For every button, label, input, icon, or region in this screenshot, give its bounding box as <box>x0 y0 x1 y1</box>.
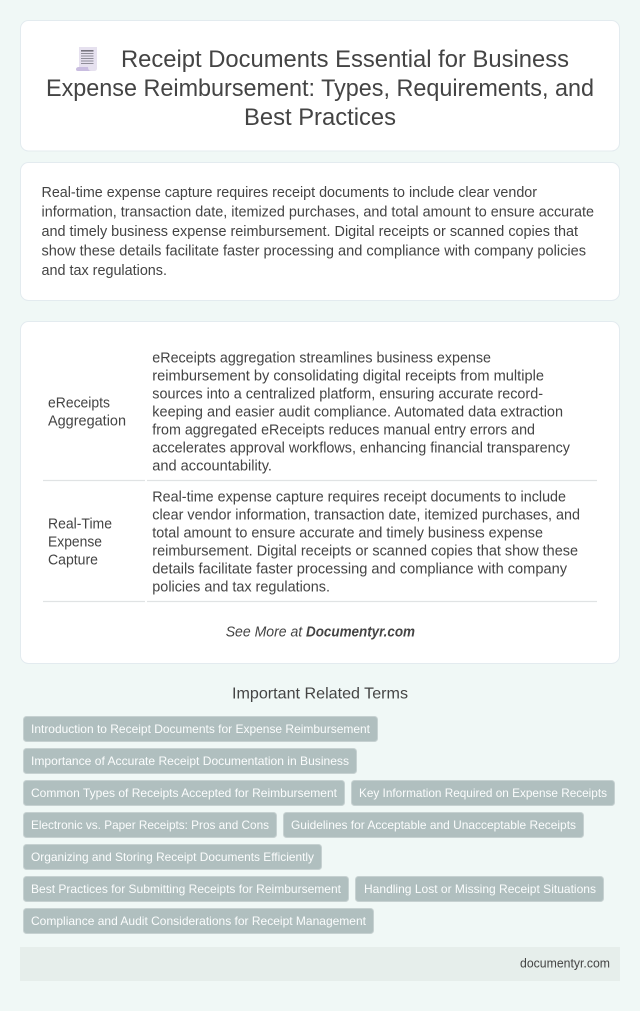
row text: Real-Time Expense Capture: total amount to ensure accurate and timely business expense <box>152 526 543 542</box>
tag <box>356 876 604 902</box>
title: Expense Reimbursement: Types, Requirements, and <box>46 75 594 102</box>
tag: Compliance and Audit Considerations for Receipt Management <box>31 914 367 928</box>
row text: Real-Time Expense Capture <box>152 490 580 596</box>
tag <box>24 748 356 774</box>
tag <box>24 780 344 806</box>
row text: Real-Time Expense Capture: details facilitate faster processing and compliance with company <box>152 562 568 578</box>
row label: eReceipts Aggregation: Aggregation <box>48 414 126 430</box>
tag <box>24 812 276 838</box>
row label: Real-Time Expense Capture: Real-Time <box>48 517 112 533</box>
text block: intro: and tax regulations. <box>42 263 167 279</box>
row text: Real-Time Expense Capture: policies and tax regulations. <box>152 580 330 596</box>
text block: intro: show these details facilitate faster processing and compliance with company policies <box>42 244 586 260</box>
panel: introduction paragraph <box>20 162 620 300</box>
title: Best Practices <box>244 104 396 131</box>
row label: eReceipts Aggregation: eReceipts <box>48 396 110 412</box>
row text: eReceipts Aggregation: reimbursement by consolidating digital receipts from multiple <box>152 369 544 385</box>
tag <box>352 780 614 806</box>
footer <box>20 947 620 981</box>
tag <box>24 716 378 742</box>
row text: eReceipts Aggregation: eReceipts aggregation streamlines business expense <box>152 351 491 367</box>
text block: intro: information, transaction date, itemized purchases, and total amount to ensure accurate <box>42 204 594 220</box>
tag: Best Practices for Submitting Receipts for Reimbursement <box>31 882 342 896</box>
link: see more <box>226 625 415 641</box>
title: Receipt Documents Essential for Business <box>121 46 569 73</box>
tag <box>24 844 322 870</box>
tag <box>284 812 584 838</box>
heading: important related terms: Important Related Terms <box>232 686 408 702</box>
row text: Real-Time Expense Capture: reimbursement. Digital receipts or scanned copies that show these <box>152 544 578 560</box>
row text: eReceipts Aggregation <box>152 351 571 475</box>
icon: receipt <box>76 47 97 71</box>
row text: eReceipts Aggregation: keeping and easier audit compliance. Automated data extraction <box>152 405 563 421</box>
tag: Electronic vs. Paper Receipts: Pros and Cons <box>31 818 269 832</box>
row text: eReceipts Aggregation: from aggregated eReceipts reduces manual entry errors and <box>152 423 535 439</box>
tag: Guidelines for Acceptable and Unacceptable Receipts <box>291 818 576 832</box>
tag: Handling Lost or Missing Receipt Situations <box>364 882 596 896</box>
text block: intro: Real-time expense capture requires receipt documents to include clear vendor <box>42 185 537 201</box>
row text: Real-Time Expense Capture: clear vendor information, transaction date, itemized purchases, and <box>152 508 580 524</box>
panel: concepts table <box>20 322 620 664</box>
link: see more: Documentyr.com <box>306 625 415 641</box>
row text: Real-Time Expense Capture: Real-time expense capture requires receipt documents to include <box>152 490 566 506</box>
tag <box>24 876 348 902</box>
footer: documentyr.com <box>520 956 610 970</box>
tag <box>24 908 374 934</box>
tag: Organizing and Storing Receipt Documents Efficiently <box>31 850 314 864</box>
row label: eReceipts Aggregation <box>48 396 126 430</box>
tag: Importance of Accurate Receipt Documentation in Business <box>31 754 349 768</box>
row label: Real-Time Expense Capture: Capture <box>48 553 98 569</box>
row label: Real-Time Expense Capture <box>48 517 112 569</box>
text block: intro: and timely business expense reimbursement. Digital receipts or scanned copies that <box>42 224 578 240</box>
tag: Common Types of Receipts Accepted for Reimbursement <box>31 786 338 800</box>
title <box>46 46 594 131</box>
text block: intro <box>42 185 594 279</box>
link: see more: See More at <box>226 625 303 641</box>
tag: Key Information Required on Expense Receipts <box>359 786 607 800</box>
row text: eReceipts Aggregation: and accountability. <box>152 459 272 475</box>
panel: related term tags <box>24 716 614 934</box>
row label: Real-Time Expense Capture: Expense <box>48 535 102 551</box>
panel: title card <box>20 20 620 151</box>
tag: Introduction to Receipt Documents for Expense Reimbursement <box>31 722 371 736</box>
row text: eReceipts Aggregation: accelerates approval workflows, enhancing financial transparency <box>152 441 571 457</box>
row text: eReceipts Aggregation: sources into a centralized platform, ensuring accurate record- <box>152 387 543 403</box>
